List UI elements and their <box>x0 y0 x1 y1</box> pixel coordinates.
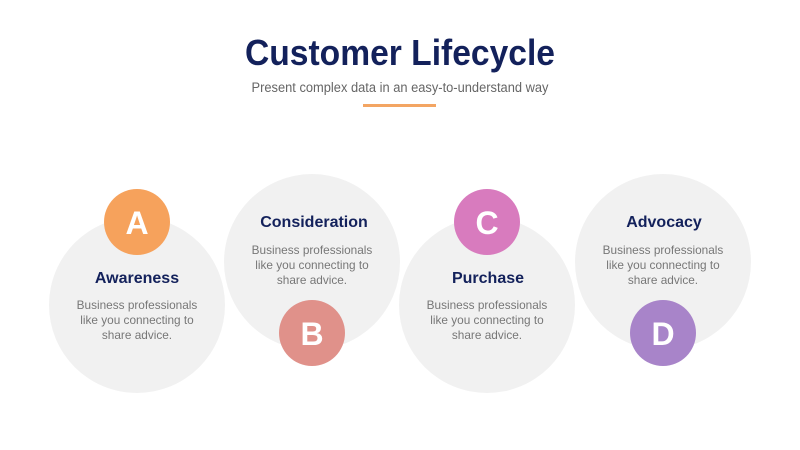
text: advocacy body: like you connecting to <box>606 258 720 272</box>
heading: purchase: Purchase <box>452 270 524 287</box>
panel: advocacy <box>575 174 751 366</box>
icon: badge D <box>630 300 696 366</box>
text: awareness body: share advice. <box>102 328 172 342</box>
panel: awareness <box>49 189 225 393</box>
panel: purchase <box>399 189 575 393</box>
icon: badge C: C <box>475 205 499 241</box>
text: purchase body: share advice. <box>452 328 522 342</box>
title: Customer Lifecycle <box>245 32 555 73</box>
text: purchase body: like you connecting to <box>430 313 544 327</box>
icon: badge A: A <box>125 205 149 241</box>
heading: consideration: Consideration <box>260 214 368 231</box>
icon: badge A <box>104 189 170 255</box>
text: advocacy body: share advice. <box>628 273 698 287</box>
heading: advocacy: Advocacy <box>626 214 702 231</box>
text: advocacy body: Business professionals <box>603 243 723 257</box>
text: consideration body: Business professionals <box>252 243 372 257</box>
icon: badge D: D <box>651 316 675 352</box>
accent underline <box>363 104 436 107</box>
text: purchase body: Business professionals <box>427 298 547 312</box>
text: consideration body: share advice. <box>277 273 347 287</box>
heading: awareness: Awareness <box>95 270 179 287</box>
icon: badge C <box>454 189 520 255</box>
text: consideration body: like you connecting to <box>255 258 369 272</box>
icon: badge B <box>279 300 345 366</box>
text: awareness body: like you connecting to <box>80 313 194 327</box>
panel: consideration <box>224 174 400 366</box>
text: awareness body: Business professionals <box>77 298 197 312</box>
icon: badge B: B <box>300 316 324 352</box>
subtitle: Present complex data in an easy-to-understand way <box>252 80 549 95</box>
